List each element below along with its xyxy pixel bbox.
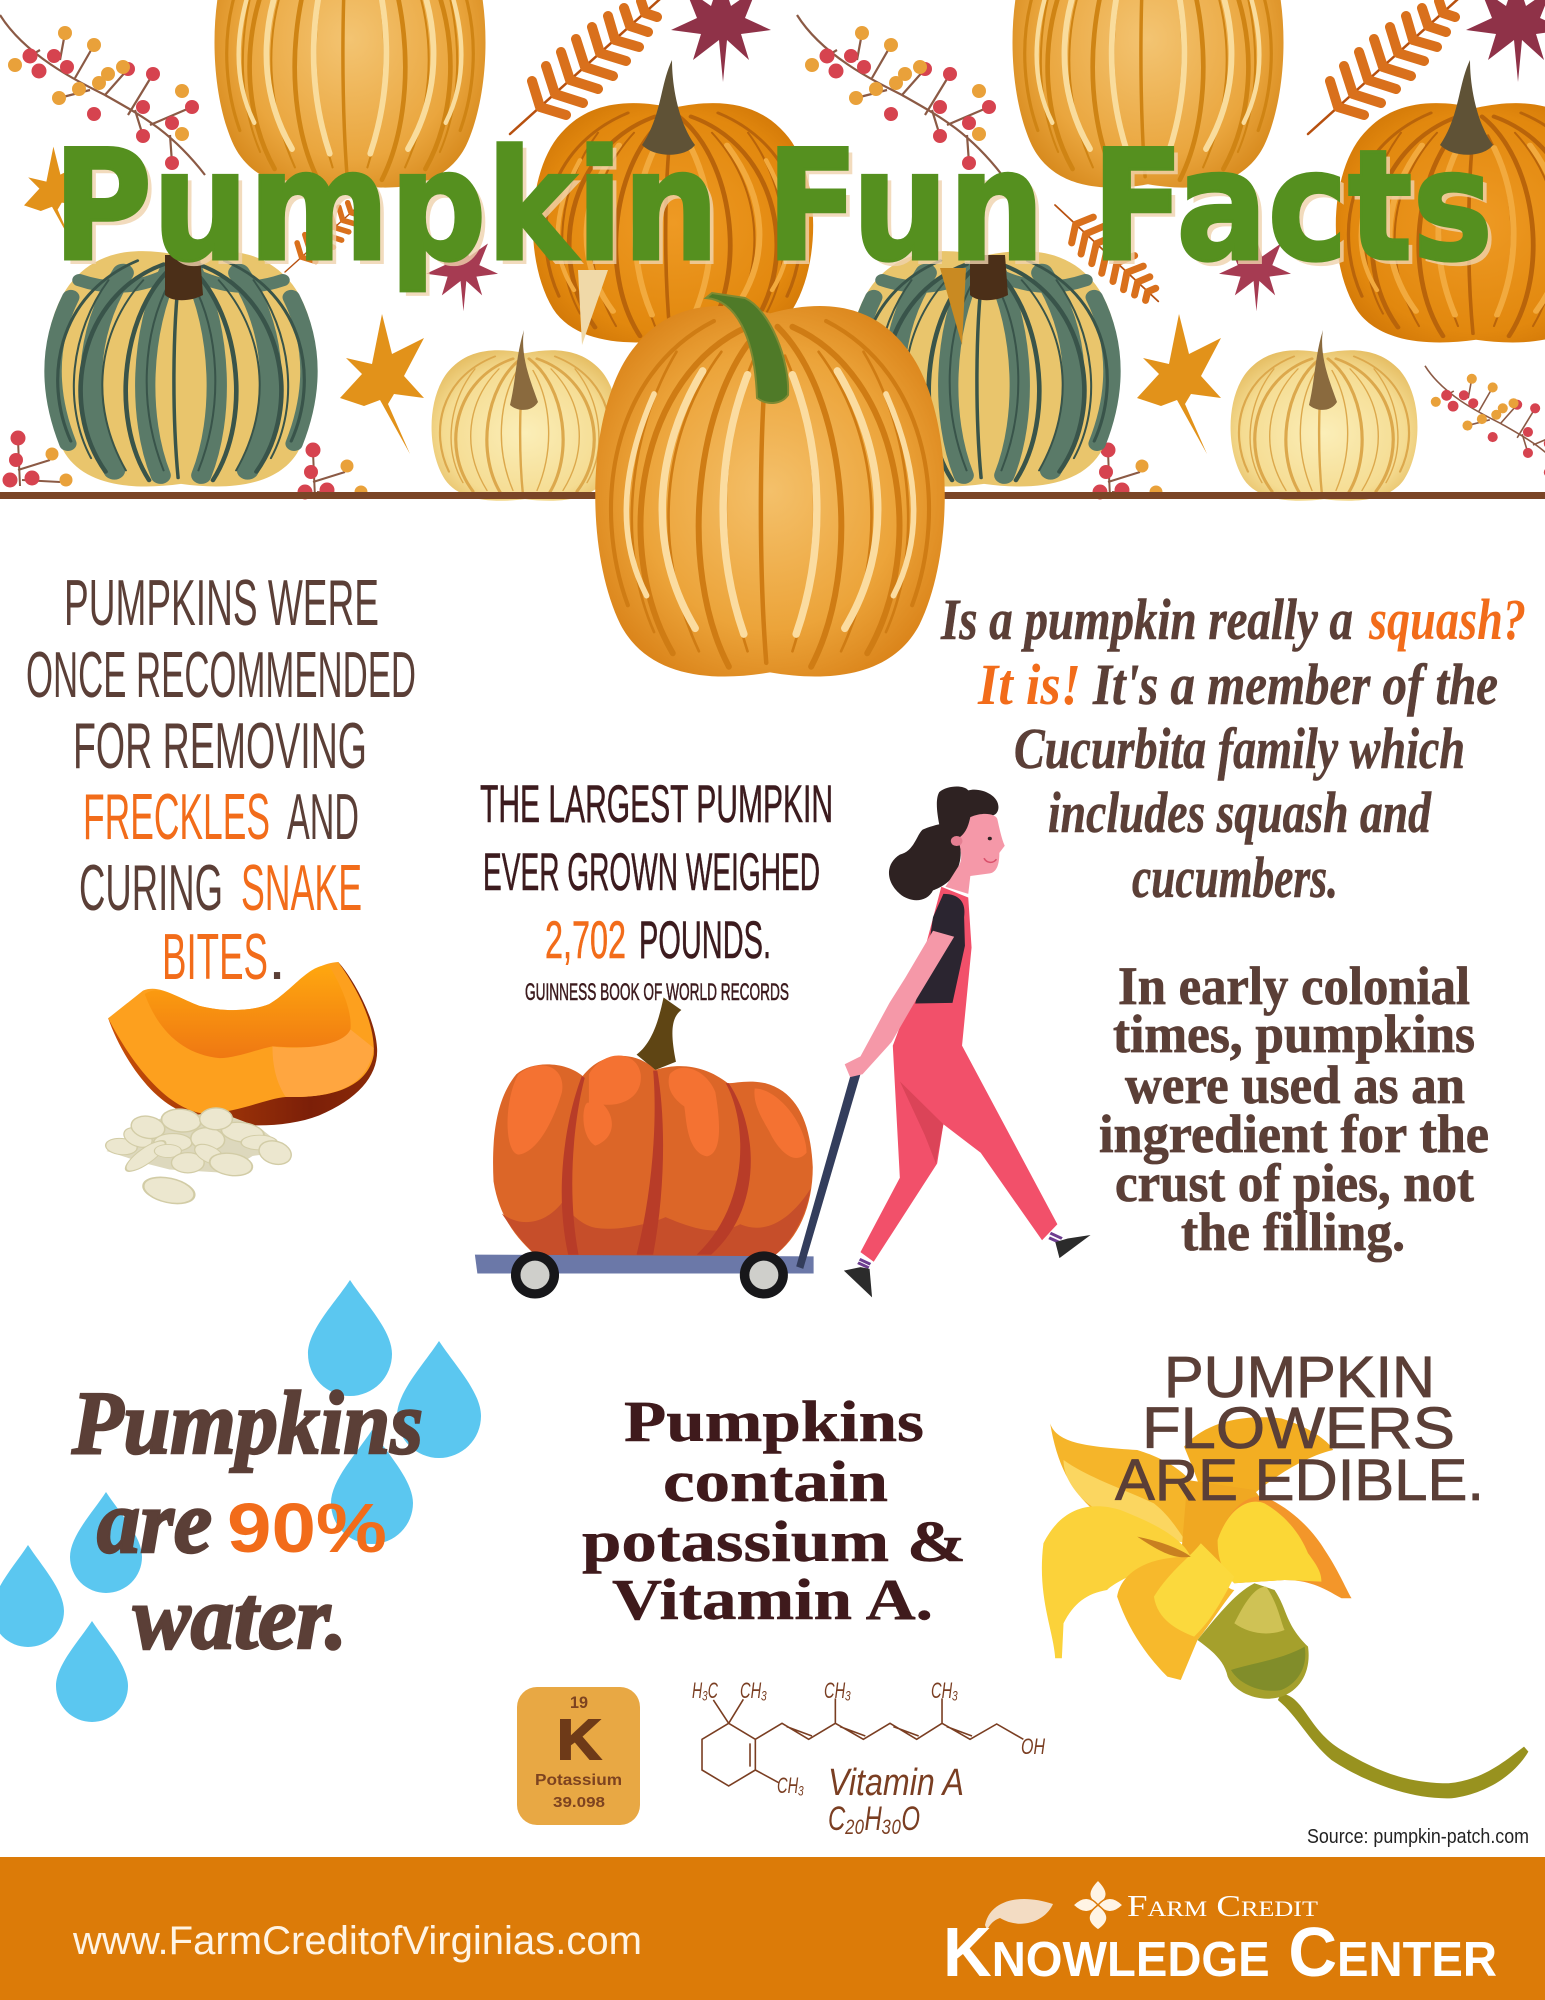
squash: green left [45, 251, 317, 487]
icon: berries lower left [2, 430, 72, 488]
text block: colonial times fact: were used as an [1125, 1055, 1465, 1115]
label: Farm Credit: Farm Credit [1127, 1888, 1319, 1923]
icon: water drops [0, 1280, 481, 1722]
pumpkin stem: orange right [1440, 60, 1493, 155]
icon: orange leaf right [1137, 314, 1221, 454]
wedge: leaf fragment on green squash [940, 268, 966, 345]
text block: flowers are edible [1115, 1345, 1484, 1513]
icon: berry branch left [0, 15, 205, 175]
text block: freckles fact: SNAKE [241, 851, 362, 924]
icon: orange leaf far left [24, 147, 83, 245]
icon: berry branch right [1425, 366, 1545, 481]
text block: potassium and vitamin A: Pumpkins [624, 1389, 924, 1454]
wedge: leaf fragment under title [578, 270, 608, 345]
footer website: www.FarmCreditofVirginias.com [72, 1919, 642, 1963]
label: Knowledge Center: Knowledge Center [943, 1913, 1497, 1991]
text block: colonial times fact: crust of pies, not [1115, 1153, 1474, 1213]
text block: freckles fact: FOR REMOVING [73, 709, 367, 782]
icon: fern leaf right [1308, 0, 1458, 134]
text block: 90% water: Pumpkins [71, 1374, 423, 1473]
text block: flowers are edible: PUMPKIN [1164, 1345, 1435, 1410]
text block: freckles fact [26, 566, 416, 993]
icon: small fern left [285, 198, 368, 272]
text block: flowers are edible: ARE EDIBLE. [1115, 1448, 1484, 1513]
text block: squash fact: cucumbers. [1132, 845, 1338, 910]
icon: purple leaf right [1219, 235, 1291, 311]
label: Vitamin A formula: C₂₀H₃₀O [828, 1800, 920, 1838]
chart: vitamin A molecule: OH [1021, 1734, 1045, 1759]
icon: fleur emblem [1073, 1880, 1123, 1930]
periodic tile: potassium: 39.098 [553, 1794, 605, 1811]
text block: squash fact: includes squash and [1048, 780, 1432, 845]
periodic tile: potassium: Potassium [535, 1772, 622, 1789]
squash stem: green left [165, 255, 203, 300]
brown divider bar [0, 492, 1545, 499]
pumpkin stem: orange centre [642, 60, 695, 155]
chart: vitamin A molecule: H₃C [692, 1678, 718, 1703]
chart: vitamin A molecule: CH₃ [824, 1678, 851, 1703]
text block: squash fact [940, 587, 1526, 910]
icon: berries lower centre-right [1092, 442, 1162, 500]
icon: leaf [985, 1899, 1053, 1930]
icon: purple leaf left [426, 235, 498, 311]
big centre pumpkin [595, 293, 945, 677]
pumpkin: gold top left [214, 0, 486, 188]
text block: 90% water [71, 1374, 423, 1668]
pumpkin stem: big [706, 293, 788, 403]
text block: freckles fact: ONCE RECOMMENDED [26, 638, 416, 711]
illustration: pumpkin flower [1042, 1417, 1528, 1798]
footer band [0, 1857, 1545, 2000]
text block: potassium and vitamin A: contain [663, 1449, 888, 1514]
squash: green right [848, 251, 1120, 487]
text block: freckles fact: PUMPKINS WERE [64, 566, 379, 639]
text block: 90% water: water. [133, 1569, 347, 1668]
icon: fern leaf left [510, 0, 660, 134]
pumpkin: orange centre [533, 103, 813, 342]
pumpkin: gold top right [1012, 0, 1284, 188]
text block: 90% water: 90% [227, 1489, 387, 1567]
pumpkin: cream left [432, 350, 618, 501]
text block: freckles fact: . [268, 920, 286, 993]
pumpkin stem: cream left [510, 330, 538, 410]
logo: Farm Credit Knowledge Center [943, 1880, 1497, 1991]
text block: largest pumpkin: EVER GROWN WEIGHED [483, 843, 820, 902]
illustration: woman pulling wagon [844, 787, 1091, 1297]
text block: freckles fact: CURING [79, 851, 223, 924]
text block: potassium and vitamin A: potassium & [582, 1509, 966, 1574]
text block: colonial times fact: times, pumpkins [1113, 1004, 1475, 1064]
icon: purple leaf top right [1466, 0, 1545, 82]
text block: colonial times fact: In early colonial [1118, 956, 1470, 1016]
text block: largest pumpkin: POUNDS. [639, 911, 771, 970]
text block: 90% water: are [97, 1473, 212, 1572]
icon: berry branch centre [797, 15, 1002, 175]
icon: orange leaf left [340, 314, 424, 454]
chart: vitamin A molecule: CH₃ [740, 1678, 767, 1703]
label: Vitamin A formula [828, 1762, 964, 1838]
illustration: pumpkin slice with seeds [105, 962, 377, 1208]
header: pumpkin pattern banner [0, 0, 1545, 501]
illustration: pumpkin on wagon [475, 997, 860, 1299]
periodic tile: potassium: K [557, 1708, 601, 1772]
icon: purple leaf top [671, 0, 771, 82]
periodic tile: potassium [517, 1687, 640, 1825]
text block: potassium and vitamin A [582, 1389, 966, 1632]
text block: flowers are edible: FLOWERS [1142, 1396, 1455, 1461]
text block: colonial times fact: ingredient for the [1099, 1104, 1489, 1164]
chart: vitamin A molecule: CH₃ [777, 1773, 804, 1798]
chart: vitamin A molecule [692, 1678, 1045, 1838]
squash stem: green right [970, 255, 1008, 300]
text block: freckles fact: FRECKLES [83, 780, 270, 853]
pumpkin: cream right [1231, 350, 1417, 501]
text block: largest pumpkin: THE LARGEST PUMPKIN [480, 775, 833, 834]
pumpkin: orange right [1336, 103, 1545, 342]
text block: freckles fact: BITES [162, 920, 268, 993]
icon: berries lower centre-left [298, 442, 368, 500]
pumpkin stem: cream right [1309, 330, 1337, 410]
text block: largest pumpkin: 2,702 [545, 911, 626, 970]
icon: small fern centre [1055, 197, 1158, 310]
text block: potassium and vitamin A: Vitamin A. [612, 1567, 933, 1632]
text block: squash fact: Is a pumpkin really a [940, 587, 1353, 652]
text block: colonial times fact [1099, 956, 1489, 1262]
text block: largest pumpkin: GUINNESS BOOK OF WORLD RECORDS [525, 979, 789, 1006]
label: Vitamin A formula: Vitamin A [828, 1762, 964, 1804]
text block: freckles fact: AND [287, 780, 359, 853]
chart: vitamin A molecule: CH₃ [931, 1678, 958, 1703]
text block: largest pumpkin [480, 775, 833, 1006]
text block: squash fact: It is! [977, 652, 1081, 717]
text block: colonial times fact: the filling. [1181, 1202, 1405, 1262]
periodic tile: potassium: 19 [570, 1693, 588, 1712]
